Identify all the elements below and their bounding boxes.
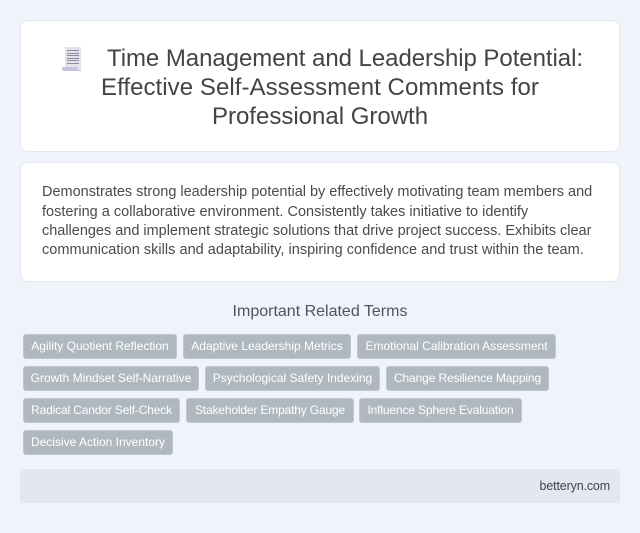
icon: document scroll (62, 47, 81, 71)
tag (359, 398, 522, 423)
footer bar (20, 469, 620, 503)
tag (186, 398, 354, 423)
title (101, 45, 583, 130)
text block: description (42, 184, 592, 258)
text block: description: communication skills and adaptability, inspiring confidence and trust within the team. (42, 242, 584, 258)
text block: description: challenges and implement strategic solutions that drive project success. Exhibits clear (42, 223, 591, 239)
tag: Stakeholder Empathy Gauge (195, 403, 345, 417)
tag (183, 334, 351, 359)
footer text: source: betteryn.com (540, 479, 610, 493)
tag: Psychological Safety Indexing (213, 371, 372, 385)
tag list (23, 334, 556, 455)
tag (23, 430, 173, 455)
tag: Growth Mindset Self-Narrative (31, 371, 191, 385)
tag: Change Resilience Mapping (394, 371, 541, 385)
tag (23, 366, 199, 391)
tag: Emotional Calibration Assessment (365, 339, 548, 353)
tag (357, 334, 556, 359)
tag (205, 366, 380, 391)
tag (386, 366, 549, 391)
title: Effective Self-Assessment Comments for (101, 74, 539, 101)
tag: Adaptive Leadership Metrics (191, 339, 343, 353)
tag (23, 398, 180, 423)
tag: Radical Candor Self-Check (31, 403, 172, 417)
tag: Decisive Action Inventory (31, 435, 165, 449)
panel: description card (20, 162, 620, 282)
tag: Influence Sphere Evaluation (367, 403, 514, 417)
heading: related terms: Important Related Terms (233, 303, 407, 320)
text block: description: fostering a collaborative environment. Consistently takes initiative to identify (42, 204, 528, 220)
title: Professional Growth (212, 103, 428, 130)
tag: Agility Quotient Reflection (31, 339, 169, 353)
text block: description: Demonstrates strong leadership potential by effectively motivating team members and (42, 184, 592, 200)
panel: title card (20, 20, 620, 152)
title: Time Management and Leadership Potential: (107, 45, 583, 72)
tag (23, 334, 177, 359)
